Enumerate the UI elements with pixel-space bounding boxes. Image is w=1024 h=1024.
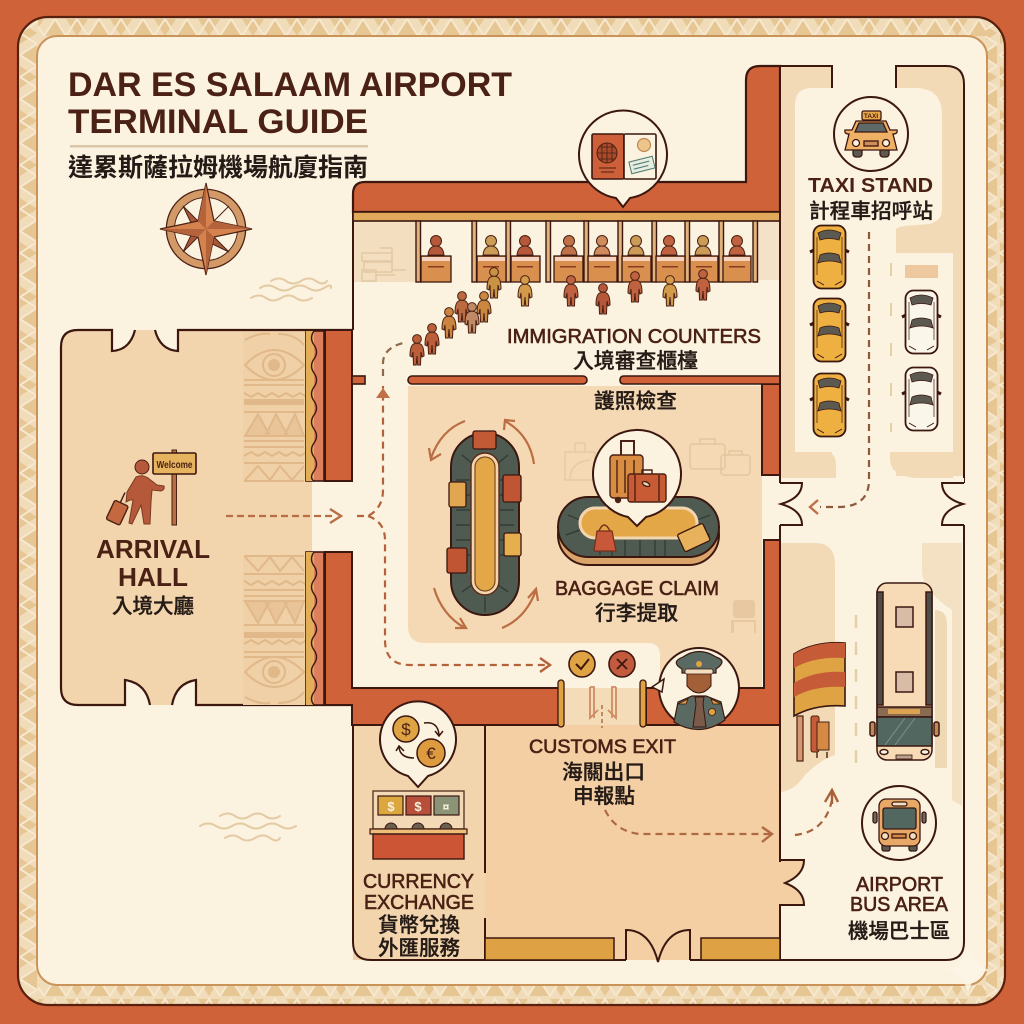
wall: top L (353, 66, 780, 212)
decorative waves top (251, 278, 331, 300)
customs cross icon (609, 651, 635, 677)
arrow: arrival to junction (226, 509, 341, 523)
label: currency exchange: CURRENCY (363, 871, 474, 893)
arrow: customs to bus stop (795, 790, 838, 835)
handbag (594, 531, 616, 551)
queue of passengers (410, 268, 710, 365)
currency exchange counter: ¤ (443, 800, 450, 814)
label: taxi stand (808, 175, 933, 223)
doors: bus hall (777, 860, 804, 905)
horizontal baggage carousel (558, 497, 719, 565)
title block (68, 66, 512, 182)
label: baggage claim (555, 578, 719, 625)
currency exchange counter: $ (387, 799, 395, 814)
label: customs exit: CUSTOMS EXIT (529, 737, 676, 758)
tribal pattern panel bottom (243, 556, 307, 705)
icon: luggage bubble (593, 430, 681, 526)
icon: currency exchange bubble (380, 701, 456, 787)
label: currency exchange: 貨幣兌換 (378, 914, 460, 937)
panel: arrival hall (61, 330, 354, 705)
panel: baggage hall floor (408, 386, 762, 725)
customs check icon (569, 651, 595, 677)
icon: passport bubble (579, 111, 667, 207)
panel: bus area road (780, 478, 964, 960)
arrival gold and zigzag strips top (306, 331, 324, 481)
arrow: customs to exit (605, 810, 772, 842)
label: customs exit: 海關出口 (562, 761, 645, 784)
luggage on carousel (447, 431, 521, 573)
faint chair (731, 600, 756, 633)
label: taxi stand: 計程車招呼站 (809, 200, 933, 223)
icon: customs officer bubble (652, 648, 739, 730)
label: immigration counters (507, 326, 761, 373)
label: currency exchange: 外匯服務 (378, 937, 460, 960)
arrow: junction down to customs (368, 516, 550, 672)
doors at hall bottom (626, 930, 690, 962)
desks (421, 256, 751, 282)
taxi front (845, 111, 897, 157)
white car 1 (902, 290, 941, 354)
currency exchange counter (370, 791, 467, 859)
wall: passport control bar left (408, 376, 587, 384)
bus shelter (794, 643, 845, 761)
tilted case (677, 523, 710, 552)
label: airport bus area (848, 874, 950, 943)
panel: lower hall (353, 725, 780, 962)
carousel rotation arrows (429, 420, 538, 628)
euro coin: € (426, 744, 436, 763)
sparkle (945, 944, 990, 994)
faint suitcases sketch (690, 439, 750, 475)
chinese title: 達累斯薩拉姆機場航廈指南 (68, 153, 368, 182)
label: customs exit: 申報點 (573, 785, 635, 808)
label: airport bus area: BUS AREA (850, 894, 949, 916)
yellow taxi 1 (810, 226, 849, 288)
passport (592, 134, 656, 179)
label: immigration counters: 入境審查櫃檯 (573, 350, 698, 373)
label: immigration counters: IMMIGRATION COUNTERS (507, 326, 761, 348)
doors: taxi-level left (775, 475, 802, 541)
icon: taxi roundel (834, 97, 908, 171)
immigration counters row (416, 221, 758, 282)
title line 1: DAR ES SALAAM AIRPORT (68, 66, 512, 104)
tribal pattern panel top (243, 332, 307, 481)
label: currency exchange: EXCHANGE (364, 892, 474, 914)
arrow: taxi route (810, 232, 869, 514)
dollar coin: $ (401, 720, 411, 739)
wall: stub (352, 376, 365, 384)
label: arrival hall: ARRIVAL (96, 534, 210, 564)
traveller with welcome sign: Welcome (156, 460, 193, 471)
faint furniture sketch (362, 248, 406, 281)
airport bus (870, 583, 939, 760)
yellow taxi 2 (810, 298, 849, 362)
customs gate (558, 680, 646, 728)
label: customs exit (529, 737, 676, 808)
wall: gold strip (353, 212, 780, 221)
panel: taxi stand road (780, 66, 964, 483)
decorative waves bottom (200, 814, 296, 840)
gold benches (485, 938, 780, 960)
lane markers taxi (890, 263, 892, 432)
label: passport check: 護照檢查 (594, 390, 677, 413)
wall: upper left (325, 330, 352, 481)
arrival gold and zigzag strips bottom (306, 552, 324, 705)
label: baggage claim: BAGGAGE CLAIM (555, 578, 719, 600)
officer (674, 652, 725, 730)
wall: lower left (325, 552, 560, 725)
wall: upper right of hall (762, 384, 780, 475)
clerks (428, 236, 745, 255)
faint luggage cart sketch (565, 443, 595, 480)
terminal walls (306, 66, 780, 725)
suitcases (610, 441, 666, 502)
wall: passport control bar right (620, 376, 780, 384)
icon: taxi roundel: TAXI (864, 113, 878, 120)
label: arrival hall: 入境大廳 (112, 595, 194, 618)
currency exchange counter: $ (414, 799, 422, 814)
taxi bench (905, 265, 938, 278)
label: airport bus area: AIRPORT (856, 874, 943, 896)
white car 2 (902, 368, 941, 430)
vertical baggage carousel (447, 431, 521, 615)
label: currency exchange (363, 871, 474, 960)
traveller with welcome sign (106, 450, 196, 525)
label: arrival hall: HALL (118, 562, 188, 592)
label: taxi stand: TAXI STAND (808, 175, 933, 197)
label: airport bus area: 機場巴士區 (848, 920, 950, 943)
panel: immigration floor (353, 212, 780, 384)
arrow: junction up to immigration (357, 343, 403, 516)
icon: bus roundel (862, 786, 936, 860)
doors: taxi-level right (942, 483, 964, 525)
bus front (873, 799, 926, 851)
yellow taxi 3 (810, 374, 849, 436)
label: baggage claim: 行李提取 (595, 602, 679, 625)
icon: compass rose (160, 183, 252, 275)
lane markers bus (855, 615, 857, 772)
title line 2: TERMINAL GUIDE (68, 103, 368, 141)
label: arrival hall (96, 534, 210, 618)
wall: lower right and customs (646, 540, 780, 725)
